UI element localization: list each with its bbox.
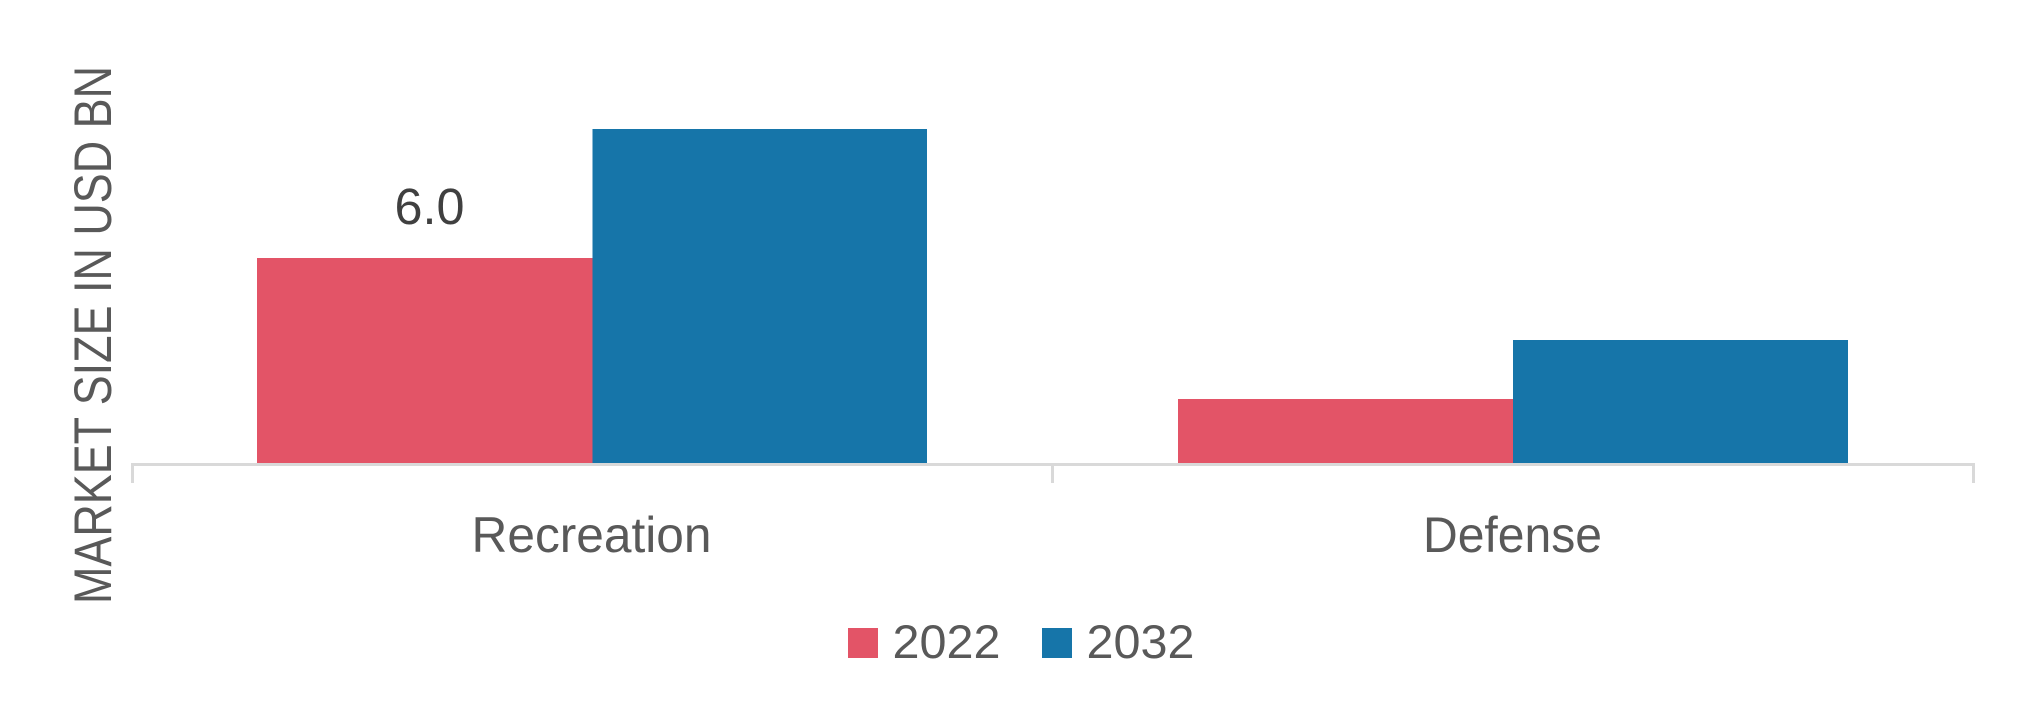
- legend item: 2032: [1042, 615, 1194, 668]
- bar group: Recreation: [257, 129, 927, 463]
- bar: Defense 2032: [1513, 340, 1848, 463]
- bar: Defense 2022: [1178, 399, 1513, 463]
- bar: Recreation 2032: [592, 129, 927, 463]
- legend: [848, 615, 1194, 668]
- data label: 6.0: 6.0: [394, 178, 464, 235]
- legend item: 2032: 2032: [1086, 615, 1194, 668]
- bar: Recreation 2022: [257, 258, 592, 463]
- category label: Defense: Defense: [1423, 507, 1602, 563]
- x axis with ticks: [131, 463, 1975, 483]
- bar group: Defense: [1178, 340, 1848, 463]
- category label: Recreation: Recreation: [472, 507, 712, 563]
- legend item: 2022: [848, 615, 1000, 668]
- legend item: 2022: 2022: [892, 615, 1000, 668]
